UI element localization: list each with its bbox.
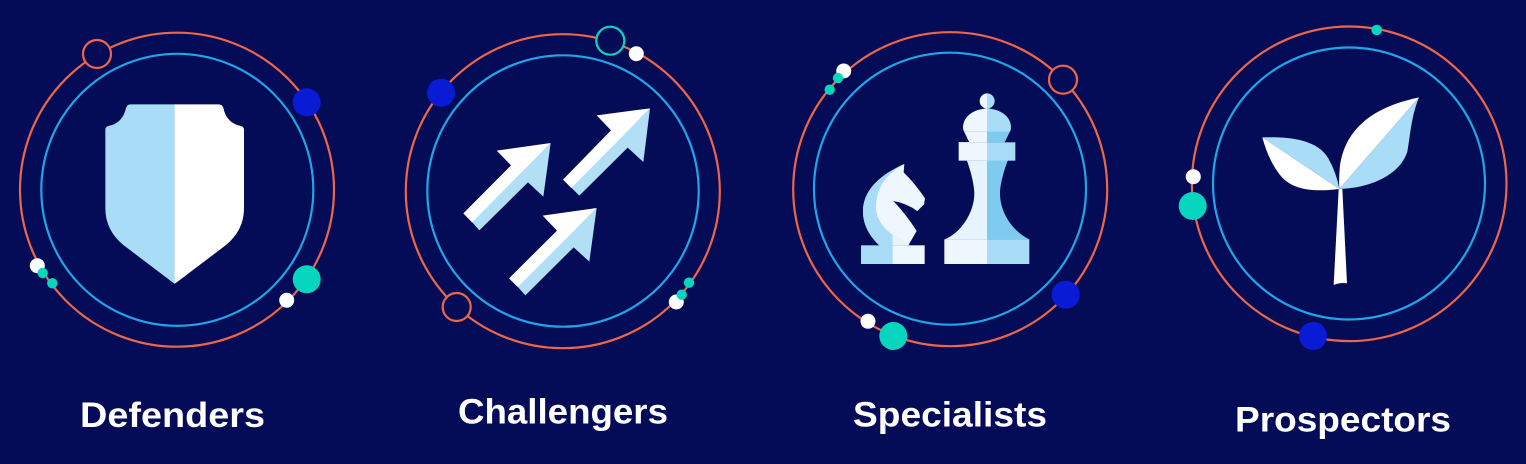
panel: challengers xyxy=(406,27,720,431)
orbit rings xyxy=(20,33,334,347)
panel: prospectors xyxy=(1179,25,1506,439)
orbit rings xyxy=(793,32,1107,346)
label: Challengers: Challengers xyxy=(458,392,668,432)
icon: sprout xyxy=(1262,97,1419,285)
knight xyxy=(861,164,925,264)
panel: specialists xyxy=(793,32,1107,434)
arrow: left xyxy=(463,143,551,230)
arrow: bottom xyxy=(509,208,597,295)
orbit dots xyxy=(824,64,1080,350)
bishop xyxy=(944,93,1029,264)
label: Prospectors: Prospectors xyxy=(1235,400,1451,440)
panel: defenders xyxy=(20,33,334,435)
orbit dots xyxy=(1179,25,1382,350)
orbit rings xyxy=(1192,26,1506,341)
orbit dots xyxy=(427,27,694,321)
arrow: right xyxy=(563,108,650,196)
icon: three rising arrows xyxy=(463,108,650,295)
orbit dots xyxy=(30,40,321,308)
label: Specialists: Specialists xyxy=(853,396,1047,434)
orbit rings xyxy=(406,34,720,348)
label: Defenders: Defenders xyxy=(80,396,265,435)
icon: chess knight and bishop xyxy=(861,93,1029,264)
icon: shield xyxy=(105,104,244,284)
